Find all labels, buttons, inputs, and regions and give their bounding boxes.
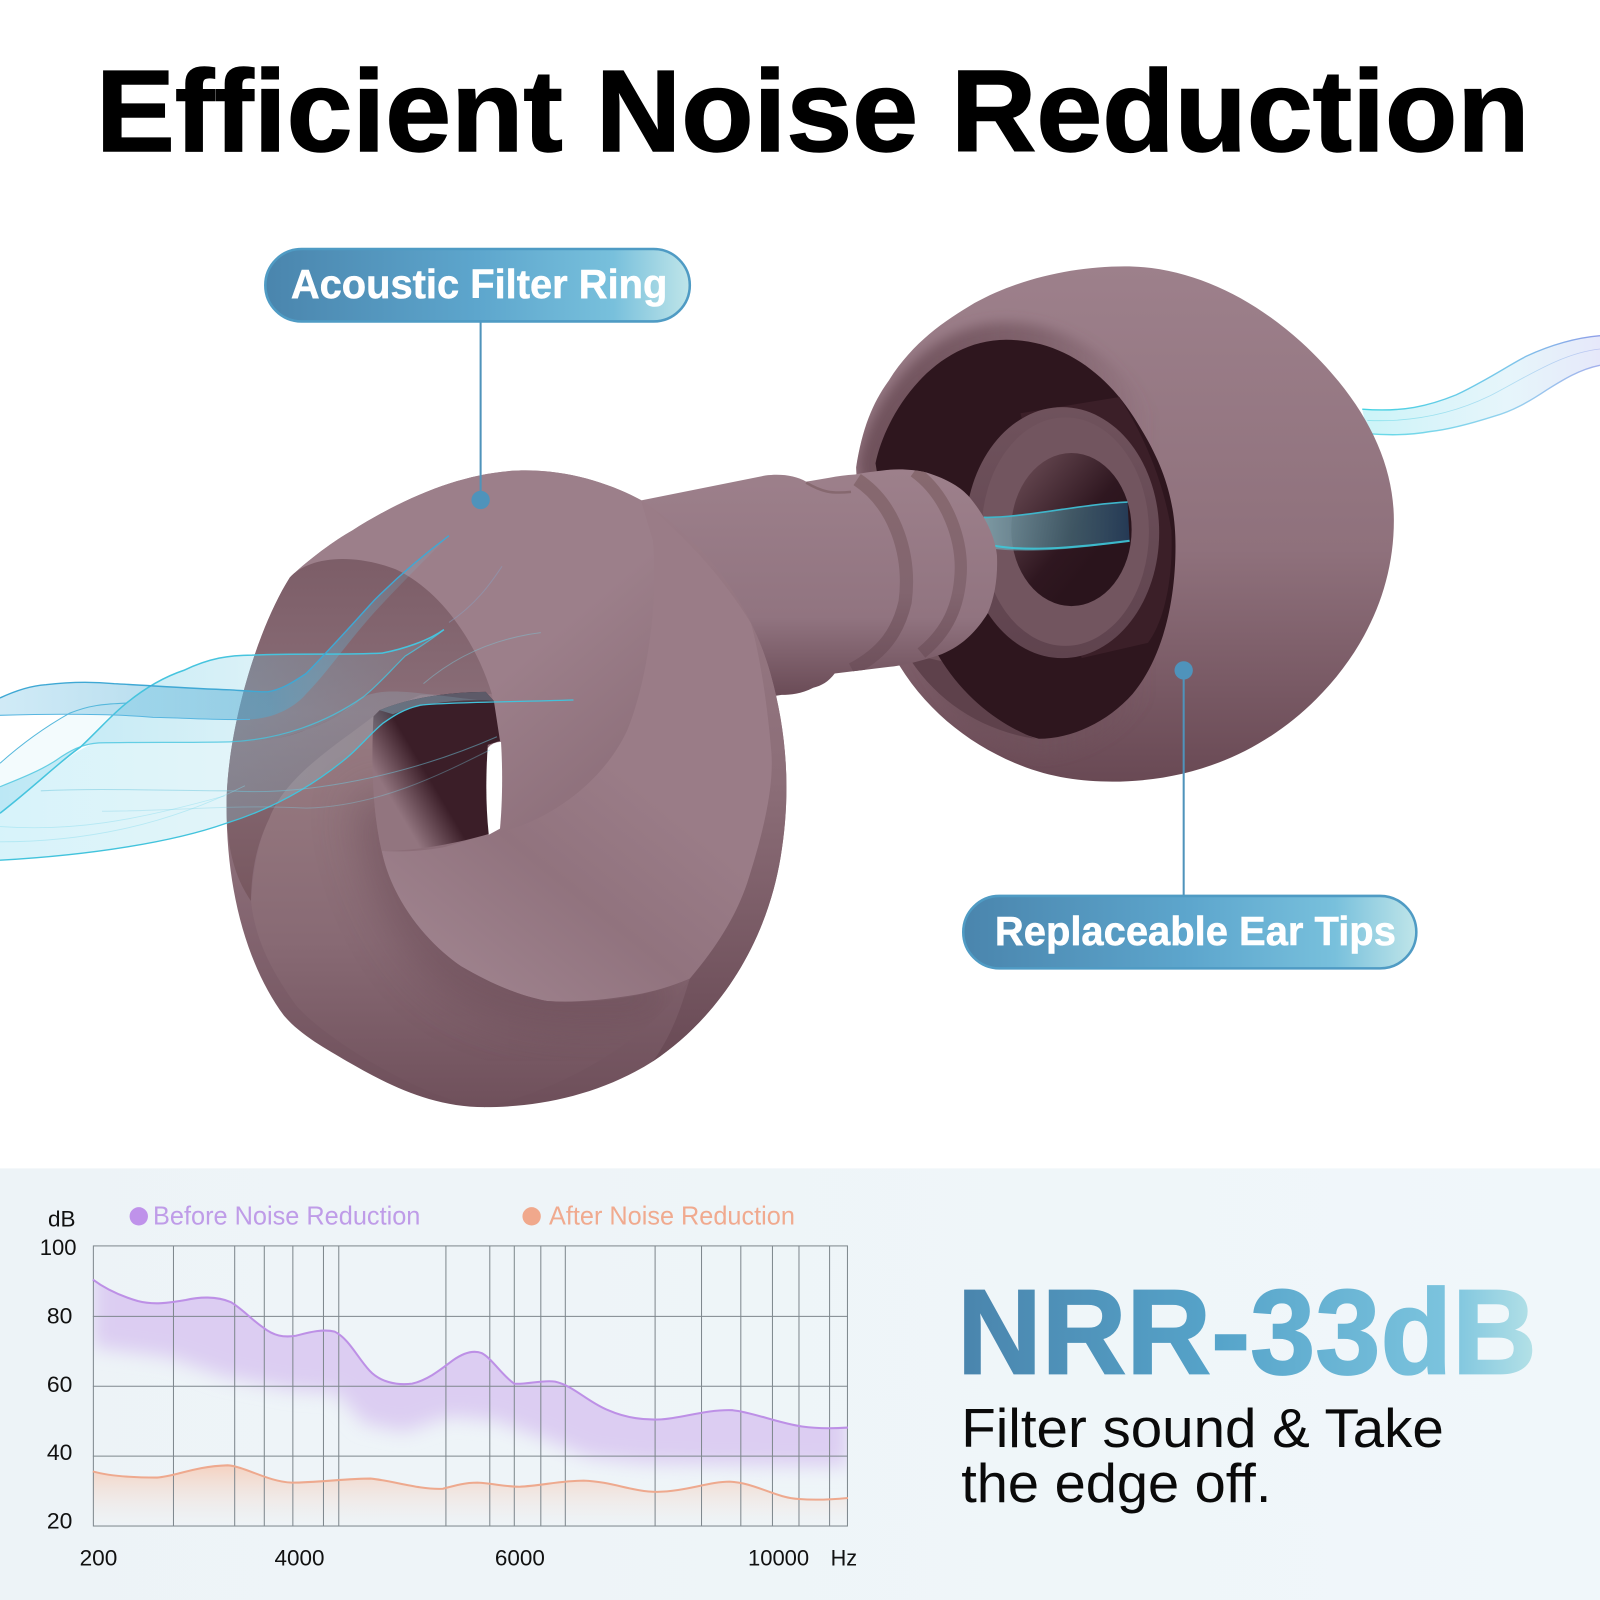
tip bore <box>1011 453 1132 606</box>
leader line and dot <box>1174 661 1193 896</box>
orange area <box>93 1465 848 1527</box>
tip dark opening <box>876 340 1176 739</box>
y axis labels: 60 <box>47 1372 72 1397</box>
icon: left sound waves <box>0 536 573 860</box>
inner wave ribbon <box>984 502 1130 551</box>
legend: after: After Noise Reduction <box>549 1202 795 1230</box>
hole white slit <box>486 742 502 835</box>
pill label: Replaceable Ear Tips <box>995 908 1396 954</box>
flange main swoosh <box>382 500 772 1002</box>
legend: before: Before Noise Reduction <box>153 1202 420 1230</box>
x axis labels: Hz <box>831 1545 857 1570</box>
acoustic filter flange <box>227 470 786 1107</box>
leader line and dot <box>471 322 490 509</box>
hole top lip <box>380 692 494 714</box>
y axis labels: 100 <box>40 1235 77 1260</box>
tip ring inner step <box>982 417 1149 646</box>
tip ring <box>965 407 1159 658</box>
callout: Replaceable Ear Tips <box>963 661 1416 968</box>
flange right rim <box>641 500 786 1061</box>
ear tip: right dome <box>856 266 1394 782</box>
illustration: ear plug <box>227 266 1394 1107</box>
subtitle: Filter sound & Take <box>961 1397 1444 1459</box>
y axis labels <box>40 1207 77 1534</box>
wave pale middle band <box>0 703 127 787</box>
flange upper surface <box>290 470 654 834</box>
pill <box>963 896 1416 968</box>
stem ribs <box>806 471 961 669</box>
chart: noise reduction <box>40 1202 857 1570</box>
grid <box>93 1246 848 1526</box>
wave blue band <box>0 536 449 720</box>
y axis labels: 40 <box>47 1440 72 1465</box>
x axis labels <box>80 1545 857 1570</box>
icon: right sound wave <box>1362 336 1600 435</box>
pill <box>265 249 690 321</box>
purple area <box>93 1265 848 1466</box>
subtitle <box>961 1397 1444 1514</box>
pill label: Acoustic Filter Ring <box>291 261 667 307</box>
tip lower inner wall <box>906 653 1036 739</box>
tip soft rim <box>856 318 1116 661</box>
x axis labels: 6000 <box>495 1545 545 1570</box>
x axis labels: 200 <box>80 1545 117 1570</box>
tip inner block <box>1020 397 1172 658</box>
wave strands <box>0 536 573 860</box>
flange lower left lobe <box>251 716 690 1107</box>
panel: bottom <box>0 1168 1600 1600</box>
after curve <box>93 1465 848 1500</box>
y axis labels: dB <box>48 1207 76 1232</box>
y axis labels: 80 <box>47 1303 72 1328</box>
flange lobe soft shade <box>382 796 673 1000</box>
NRR heading: NRR-33dB <box>957 1264 1537 1399</box>
before curve <box>93 1280 848 1428</box>
wave fan <box>0 691 573 860</box>
flange funnel <box>227 559 492 901</box>
wave upper band <box>0 630 444 813</box>
x axis labels: 4000 <box>274 1545 324 1570</box>
callout: Acoustic Filter Ring <box>265 249 690 509</box>
title: Efficient Noise Reduction <box>96 46 1530 176</box>
subtitle: the edge off. <box>961 1452 1271 1514</box>
stem <box>633 469 997 714</box>
y axis labels: 20 <box>47 1509 72 1534</box>
flange hole <box>372 692 500 851</box>
x axis labels: 10000 <box>748 1545 809 1570</box>
